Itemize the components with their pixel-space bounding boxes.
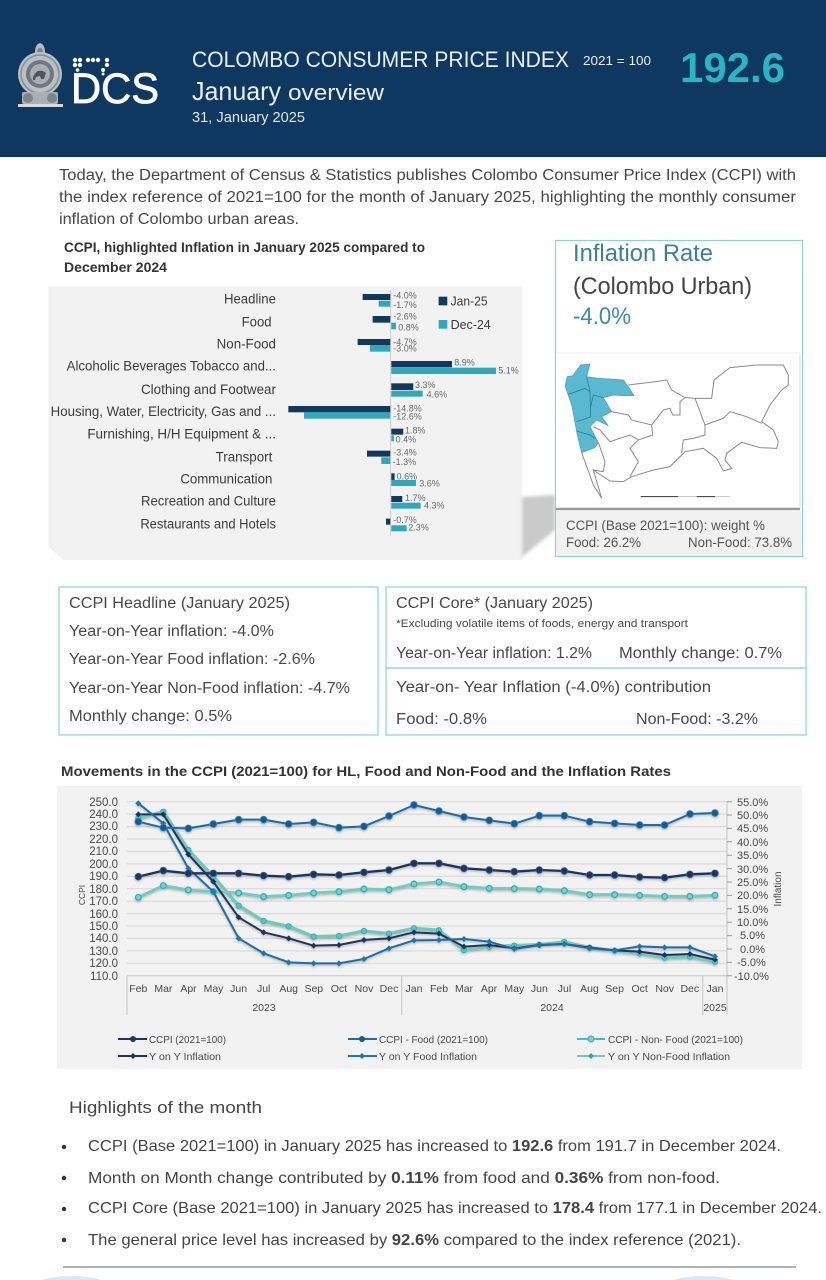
right axis labels: 30.0% [737, 864, 768, 876]
chart legend: CCPI (2021=100) [149, 1034, 226, 1046]
month labels: May [504, 983, 525, 995]
bar value labels: -4.7% [393, 337, 417, 347]
right axis labels: -10.0% [734, 971, 769, 983]
panel: CCPI core [386, 587, 806, 735]
bar chart heading: December 2024 [64, 260, 168, 275]
series: CCPI food [138, 805, 715, 828]
left axis labels: 150.0 [89, 921, 118, 933]
left axis labels: 120.0 [89, 958, 118, 970]
bar value labels: 1.8% [405, 425, 425, 435]
month labels: Dec [680, 983, 699, 995]
bar value labels: -2.6% [393, 312, 417, 322]
region label: (Colombo Urban) [573, 273, 752, 300]
highlights list [62, 1138, 822, 1249]
plotted series [138, 803, 715, 963]
year labels: 2024 [540, 1002, 564, 1014]
icon: national emblem [18, 43, 63, 107]
month labels: Dec [380, 983, 398, 995]
bar value labels: 4.6% [427, 390, 447, 400]
left axis labels: 220.0 [89, 834, 118, 846]
panel: CCPI core: Year-on- Year Inflation (-4.0%) contribution [396, 679, 711, 696]
map card [556, 353, 800, 508]
category labels: Non-Food [217, 336, 276, 351]
month labels: Oct [331, 983, 347, 995]
right axis labels [734, 797, 769, 983]
series: Y on Y inflation [138, 814, 715, 960]
bar value labels: 0.6% [397, 472, 417, 482]
bar value labels: -14.8% [393, 404, 422, 414]
axes [127, 802, 727, 1015]
month labels: Apr [180, 983, 197, 995]
series: CCPI non-food [138, 882, 715, 897]
bar value labels: 3.3% [415, 380, 435, 390]
right axis labels: 0.0% [740, 944, 765, 956]
headline index value: 192.6 [680, 44, 785, 91]
panel: CCPI core: Monthly change: 0.7% [619, 645, 782, 662]
panel: CCPI core: CCPI Core* (January 2025) [396, 595, 593, 612]
bar value labels: 0.8% [398, 322, 419, 332]
left axis labels: 180.0 [89, 884, 118, 896]
bars: Dec-24 [304, 301, 496, 531]
right axis labels: 5.0% [740, 930, 765, 942]
bar chart heading [64, 240, 425, 275]
footer decoration [21, 1276, 753, 1280]
bar value labels: 5.1% [498, 366, 519, 376]
month labels: Feb [129, 983, 148, 995]
left axis labels: 230.0 [89, 821, 118, 833]
right axis labels: 10.0% [737, 917, 768, 929]
panel: CCPI headline: Monthly change: 0.5% [69, 708, 232, 725]
right axis labels: 20.0% [737, 890, 768, 902]
category labels: Alcoholic Beverages Tobacco and... [67, 359, 276, 374]
icon: braille dots [73, 58, 109, 76]
chart legend: Y on Y Non-Food Inflation [608, 1051, 730, 1063]
left axis labels: 190.0 [89, 871, 118, 883]
rate value: -4.0% [573, 303, 631, 330]
left axis labels: 200.0 [89, 859, 118, 871]
year labels [252, 1002, 727, 1014]
category labels: Transport [216, 449, 273, 464]
panel: CCPI headline: CCPI Headline (January 2025) [69, 595, 290, 612]
chart legend [118, 1034, 743, 1063]
panel: CCPI core: *Excluding volatile items of foods, energy and transport [396, 618, 688, 630]
intro paragraph: Today, the Department of Census & Statistics publishes Colombo Consumer Price Index (CCPI) with [59, 167, 796, 184]
chart legend: CCPI - Non- Food (2021=100) [608, 1034, 743, 1046]
month labels: Mar [455, 983, 474, 995]
month labels: Apr [481, 983, 498, 995]
panel: CCPI headline [59, 587, 378, 735]
panel: inflation rate and map: Non-Food: 73.8% [688, 535, 792, 550]
highlights heading: Highlights of the month [69, 1098, 262, 1117]
bar value labels: -3.4% [393, 448, 417, 458]
month labels: Nov [355, 983, 374, 995]
bars: Jan-25 [288, 294, 452, 525]
left axis labels: 210.0 [89, 846, 118, 858]
chart legend: CCPI - Food (2021=100) [379, 1034, 488, 1046]
panel: CCPI core: Year-on-Year inflation: 1.2% [396, 645, 592, 662]
grid lines [127, 802, 727, 963]
panel: CCPI core: Non-Food: -3.2% [636, 711, 758, 728]
intro paragraph: inflation of Colombo urban areas. [59, 211, 299, 228]
category labels: Communication [180, 471, 272, 486]
bar value labels: -12.6% [393, 412, 422, 422]
bar value labels: -4.0% [393, 291, 417, 301]
category labels [51, 291, 276, 532]
bar value labels: -1.7% [393, 300, 417, 310]
axis [389, 290, 392, 535]
intro paragraph: the index reference of 2021=100 for the month of January 2025, highlighting the monthly consumer [59, 189, 796, 206]
month labels: Jul [558, 983, 571, 995]
right axis labels: 55.0% [737, 797, 768, 809]
month labels: Jan [707, 983, 724, 995]
subtitle: January [192, 76, 281, 106]
left axis labels: 160.0 [89, 909, 118, 921]
logo wordmark: DCS [71, 65, 159, 113]
month labels: Feb [430, 983, 448, 995]
bar value labels: 1.7% [405, 493, 425, 503]
left axis labels: 170.0 [89, 896, 118, 908]
bar value labels: 8.9% [454, 358, 475, 368]
inflation rate heading: Inflation Rate [573, 240, 713, 267]
category labels: Headline [224, 291, 276, 306]
chart legend: Y on Y Food Inflation [379, 1051, 477, 1063]
intro paragraph [59, 167, 796, 228]
left axis labels: 250.0 [89, 797, 118, 809]
left axis labels: 130.0 [89, 946, 118, 958]
bar value labels [393, 291, 519, 533]
series: CCPI [138, 863, 715, 878]
panel: inflation rate and map: CCPI (Base 2021=100): weight % [566, 518, 765, 533]
bar value labels: -1.3% [393, 457, 416, 467]
month labels: May [204, 983, 224, 995]
panel: CCPI core: Food: -0.8% [396, 711, 487, 728]
right axis labels: 50.0% [737, 810, 768, 822]
legend [439, 293, 491, 332]
right axis labels: 35.0% [737, 850, 768, 862]
month labels: Aug [580, 983, 599, 995]
scale bar [641, 495, 715, 498]
highlights list: CCPI (Base 2021=100) in January 2025 has increased to 192.6 from 191.7 in December 2024. [88, 1138, 781, 1155]
left axis labels: 240.0 [89, 809, 118, 821]
left axis labels: 140.0 [89, 933, 118, 945]
panel: inflation bar chart [48, 287, 522, 560]
month labels: Aug [279, 983, 298, 995]
chart legend: Y on Y Inflation [149, 1051, 221, 1063]
highlights list: CCPI Core (Base 2021=100) in January 2025 has increased to 178.4 from 177.1 in December 2024. [88, 1200, 822, 1217]
legend: Jan-25 [451, 293, 488, 308]
category labels: Furnishing, H/H Equipment & ... [87, 426, 276, 441]
line chart heading: Movements in the CCPI (2021=100) for HL, Food and Non-Food and the Inflation Rates [61, 763, 671, 779]
panel: CCPI headline: Year-on-Year inflation: -4.0% [69, 623, 274, 640]
year labels: 2025 [703, 1002, 727, 1014]
left axis labels: 110.0 [90, 971, 118, 983]
right axis labels: -5.0% [737, 957, 766, 969]
right axis labels: 15.0% [737, 904, 768, 916]
bar value labels: -0.7% [393, 515, 417, 525]
panel: line chart [57, 786, 802, 1069]
month labels: Sep [605, 983, 624, 995]
month labels: Oct [632, 983, 648, 995]
date: 31, January 2025 [192, 110, 305, 126]
month labels: Nov [655, 983, 675, 995]
highlights list: Month on Month change contributed by 0.11% from food and 0.36% from non-food. [88, 1170, 720, 1187]
bar chart heading: CCPI, highlighted Inflation in January 2025 compared to [64, 240, 425, 255]
panel: inflation rate and map: Food: 26.2% [566, 535, 641, 550]
right axis title: Inflation [773, 871, 784, 907]
base year: 2021 = 100 [583, 54, 651, 68]
bar value labels: 2.3% [408, 523, 429, 533]
category labels: Housing, Water, Electricity, Gas and ... [51, 404, 276, 419]
right axis labels: 40.0% [737, 837, 768, 849]
right axis labels: 45.0% [737, 823, 768, 835]
left axis title: CCPI [77, 885, 87, 905]
month labels: Jan [406, 983, 423, 995]
legend: Dec-24 [451, 317, 491, 332]
weights panel [556, 511, 802, 556]
bar value labels: 0.4% [396, 435, 416, 445]
panel: CCPI headline: Year-on-Year Food inflation: -2.6% [69, 651, 315, 668]
header banner [0, 0, 826, 157]
category labels: Food [242, 314, 272, 329]
highlights list: The general price level has increased by 92.6% compared to the index reference (2021). [88, 1232, 741, 1249]
bar value labels: -3.0% [393, 344, 417, 354]
header banner: overview [288, 80, 384, 105]
month labels: Jul [257, 983, 270, 995]
panel: CCPI headline: Year-on-Year Non-Food inflation: -4.7% [69, 680, 350, 697]
month labels: Sep [304, 983, 323, 995]
month labels [129, 983, 724, 995]
series: Y on Y non-food inflation [138, 812, 715, 962]
month labels: Jun [531, 983, 548, 995]
bar value labels: 3.6% [419, 478, 440, 488]
category labels: Recreation and Culture [141, 494, 276, 509]
shadow beside map [522, 495, 555, 557]
category labels: Clothing and Footwear [141, 382, 276, 397]
series: Y on Y food inflation [138, 803, 715, 963]
category labels: Restaurants and Hotels [140, 517, 276, 532]
month labels: Jun [230, 983, 247, 995]
map: Colombo urban districts [565, 364, 788, 498]
panel: inflation rate and map [556, 240, 802, 556]
bar value labels: 4.3% [424, 501, 444, 511]
title: COLOMBO CONSUMER PRICE INDEX [192, 47, 569, 72]
right axis labels: 25.0% [737, 877, 768, 889]
month labels: Mar [154, 983, 173, 995]
year labels: 2023 [252, 1002, 276, 1014]
left axis labels [89, 797, 118, 983]
